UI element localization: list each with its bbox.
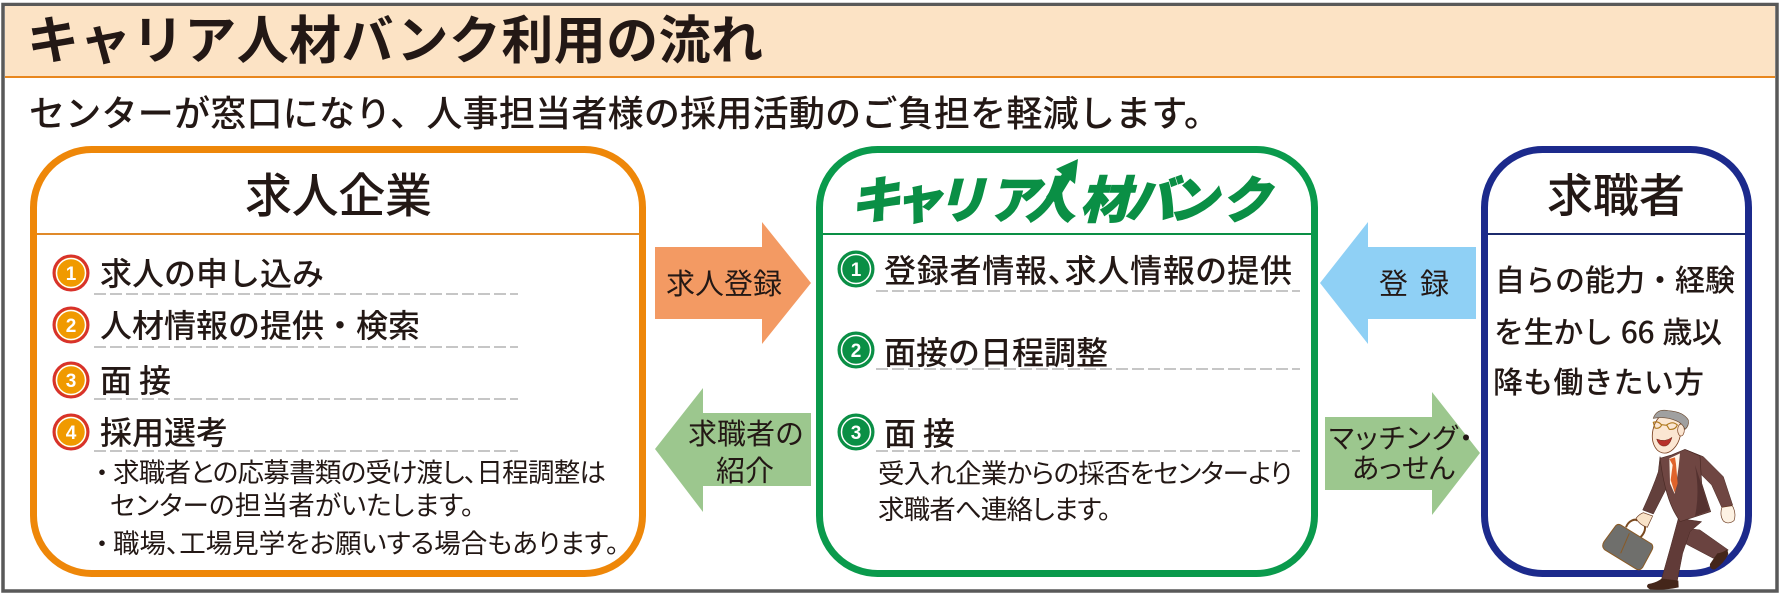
description: を生かし 66 歳以	[1494, 308, 1722, 352]
left hand	[1636, 513, 1653, 527]
back shoe	[1710, 549, 1728, 569]
step 2: 面接の日程調整	[884, 335, 1108, 371]
step 3: 3	[66, 371, 76, 392]
step 3	[839, 415, 1300, 452]
icon: walking man with briefcase	[1603, 410, 1735, 590]
description: 自らの能力・経験	[1495, 265, 1735, 298]
panel: 求職者	[1484, 150, 1748, 574]
front leg	[1662, 518, 1702, 581]
arrow: マッチング・あっせん: マッチング・	[1329, 423, 1473, 454]
tie	[1669, 457, 1678, 493]
notes	[89, 458, 619, 559]
step 4: 採用選考	[100, 415, 228, 451]
step 4: 4	[66, 423, 77, 444]
arrow: 登録: 登 録	[1379, 268, 1449, 301]
title banner	[5, 6, 1775, 78]
front shoe	[1647, 579, 1679, 590]
note	[878, 459, 1292, 525]
left arm	[1643, 457, 1671, 514]
step 2	[54, 308, 518, 347]
right hand	[1721, 506, 1735, 523]
arrow: 求職者の紹介: 紹介	[716, 455, 774, 488]
step 1: 1	[66, 264, 77, 285]
logo: キャリア人材バンク	[847, 173, 1282, 229]
ear	[1678, 424, 1684, 436]
bag handle	[1626, 520, 1645, 538]
right arm	[1687, 450, 1733, 508]
step 3: 面 接	[100, 363, 171, 399]
jacket	[1660, 449, 1711, 522]
glasses	[1653, 422, 1677, 429]
step 2: 人材情報の提供・検索	[100, 308, 420, 344]
head	[1649, 410, 1685, 456]
back leg	[1682, 528, 1728, 558]
arrow: 登録	[1320, 222, 1476, 344]
step 3: 3	[851, 423, 861, 444]
arrow: マッチング・あっせん	[1325, 392, 1480, 515]
arrow: 求職者の紹介	[655, 388, 811, 512]
arrow: マッチング・あっせん: あっせん	[1352, 453, 1455, 484]
step 3: 面 接	[884, 416, 955, 452]
notes: 求職者との応募書類の受け渡し、日程調整は	[113, 458, 606, 488]
subtitle: センターが窓口になり、人事担当者様の採用活動のご負担を軽減します。	[29, 93, 1220, 134]
panel: 求人企業	[34, 150, 642, 574]
notes: 職場、工場見学をお願いする場合もあります。	[113, 529, 619, 559]
step 1: 登録者情報、求人情報の提供	[884, 253, 1292, 289]
step 4	[54, 415, 518, 451]
title banner: キャリア人材バンク利用の流れ	[27, 13, 763, 71]
description	[1493, 265, 1735, 400]
step 2	[839, 333, 1300, 371]
step 3	[54, 363, 518, 399]
panel: キャリア人材バンク	[820, 150, 1314, 574]
notes: ・	[89, 458, 115, 488]
arrow: 求人登録	[655, 222, 811, 344]
notes: ・	[89, 529, 115, 559]
step 1: 1	[851, 260, 862, 281]
briefcase	[1603, 524, 1653, 570]
mouth	[1657, 437, 1672, 446]
arrow: 求職者の紹介: 求職者の	[688, 418, 804, 451]
step 2: 2	[851, 341, 861, 362]
heading: 求人企業: 求人企業	[245, 170, 432, 222]
arrow: 求人登録: 求人登録	[666, 268, 782, 301]
hair	[1653, 410, 1689, 429]
step 2: 2	[66, 316, 76, 337]
step 1	[54, 256, 518, 294]
notes: センターの担当者がいたします。	[110, 491, 474, 521]
shirt	[1669, 453, 1680, 494]
jacket shading	[1695, 465, 1709, 516]
note: 受入れ企業からの採否をセンターより	[878, 459, 1292, 489]
step 1: 求人の申し込み	[100, 256, 324, 292]
note: 求職者へ連絡します。	[878, 495, 1111, 525]
description: 降も働きたい方	[1493, 367, 1704, 400]
heading: 求職者: 求職者	[1547, 170, 1685, 222]
